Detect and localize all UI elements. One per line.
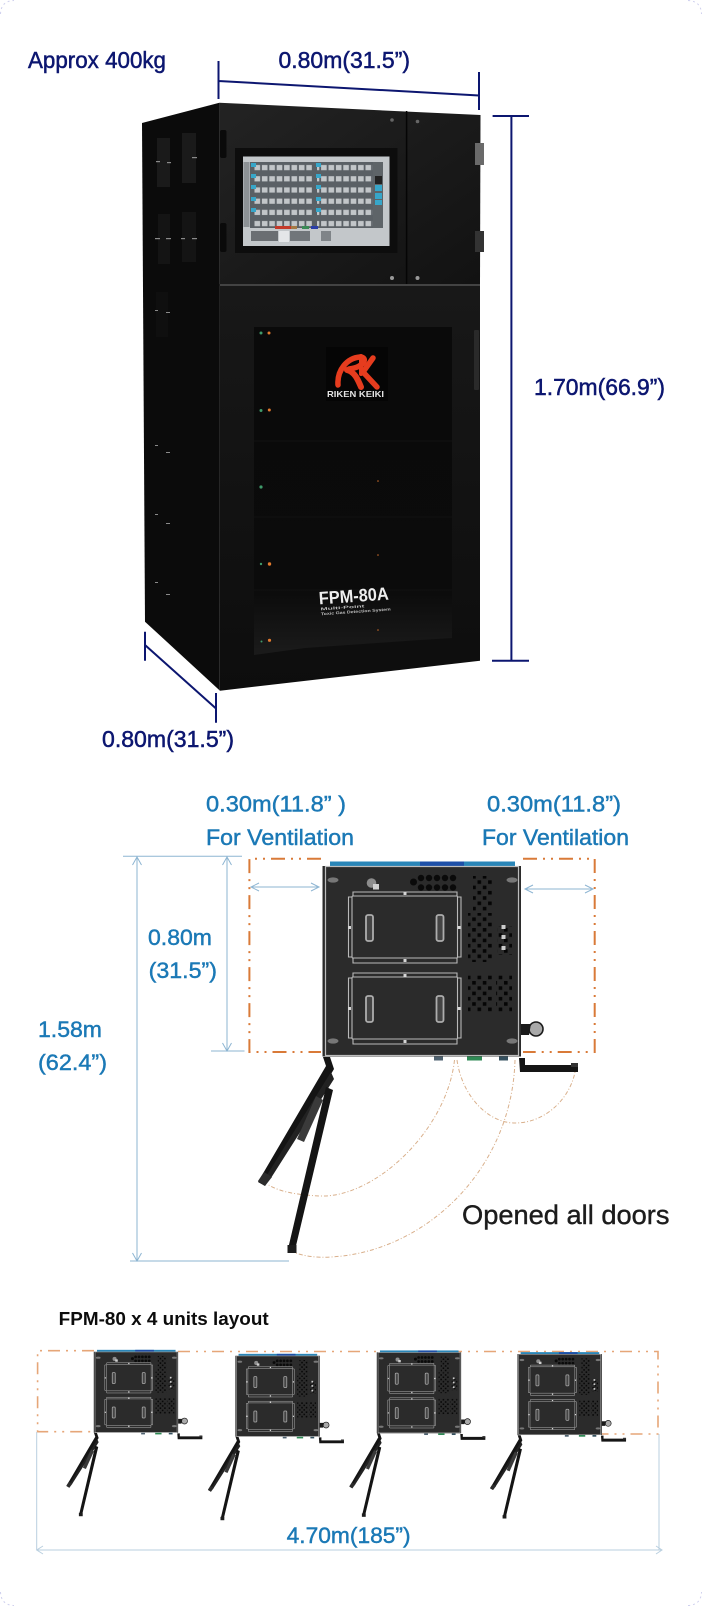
Riken Keiki logo: [326, 347, 388, 401]
side vents: [155, 133, 197, 595]
height dimension label: 1.70m(66.9”): [534, 374, 665, 400]
unit 4: [490, 1352, 626, 1519]
total depth label: 1.58m: [38, 1017, 102, 1042]
weight label: Approx 400kg: [28, 47, 166, 73]
upper door: [219, 103, 480, 284]
right ventilation label: 0.30m(11.8”): [487, 792, 621, 817]
cabinet photo: [142, 103, 484, 691]
cabinet depth label: (31.5”): [149, 958, 217, 983]
total depth label: [38, 1017, 107, 1075]
depth dimension label: 0.80m(31.5”): [102, 726, 234, 752]
Riken Keiki logo: RIKEN KEIKI: [327, 389, 384, 399]
touch screen: [235, 148, 398, 253]
cabinet plan view with open doors: [258, 862, 578, 1253]
right ventilation label: [482, 792, 629, 850]
cabinet side panel: [142, 103, 220, 691]
door glass: [254, 327, 452, 655]
ventilation clearance boxes: [249, 859, 595, 1052]
door handle: [474, 330, 479, 390]
door hinges and bolts: [220, 118, 484, 280]
left ventilation label: For Ventilation: [206, 825, 354, 850]
layout title: FPM-80 x 4 units layout: [59, 1308, 269, 1329]
layout row of four units: [66, 1350, 626, 1520]
product name: FPM-80A: [318, 584, 389, 608]
status LEDs: [259, 332, 379, 642]
width dimension label: 0.80m(31.5”): [278, 47, 410, 73]
total depth label: (62.4”): [38, 1050, 107, 1075]
opened doors label: Opened all doors: [462, 1200, 670, 1230]
overall width label: 4.70m(185”): [287, 1523, 411, 1548]
right ventilation label: For Ventilation: [482, 825, 629, 850]
overall width dimension: [37, 1432, 662, 1554]
dimension lines and arrows: [123, 856, 593, 1261]
unit 3: [349, 1350, 485, 1517]
door swing arcs: [269, 1060, 575, 1257]
left ventilation label: [206, 792, 354, 850]
cabinet depth label: [148, 925, 217, 983]
width dimension line: [218, 61, 479, 110]
cabinet depth label: 0.80m: [148, 925, 212, 950]
left ventilation label: 0.30m(11.8” ): [206, 792, 346, 817]
unit 1: [66, 1350, 202, 1516]
product name: Toxic Gas Detection System: [321, 606, 391, 616]
unit 2: [208, 1354, 344, 1520]
product name: Multi-Point: [320, 603, 366, 611]
height dimension line: [492, 116, 529, 661]
lower door: [220, 286, 480, 691]
depth dimension line: [145, 632, 216, 723]
layout clearance box: [38, 1351, 658, 1434]
